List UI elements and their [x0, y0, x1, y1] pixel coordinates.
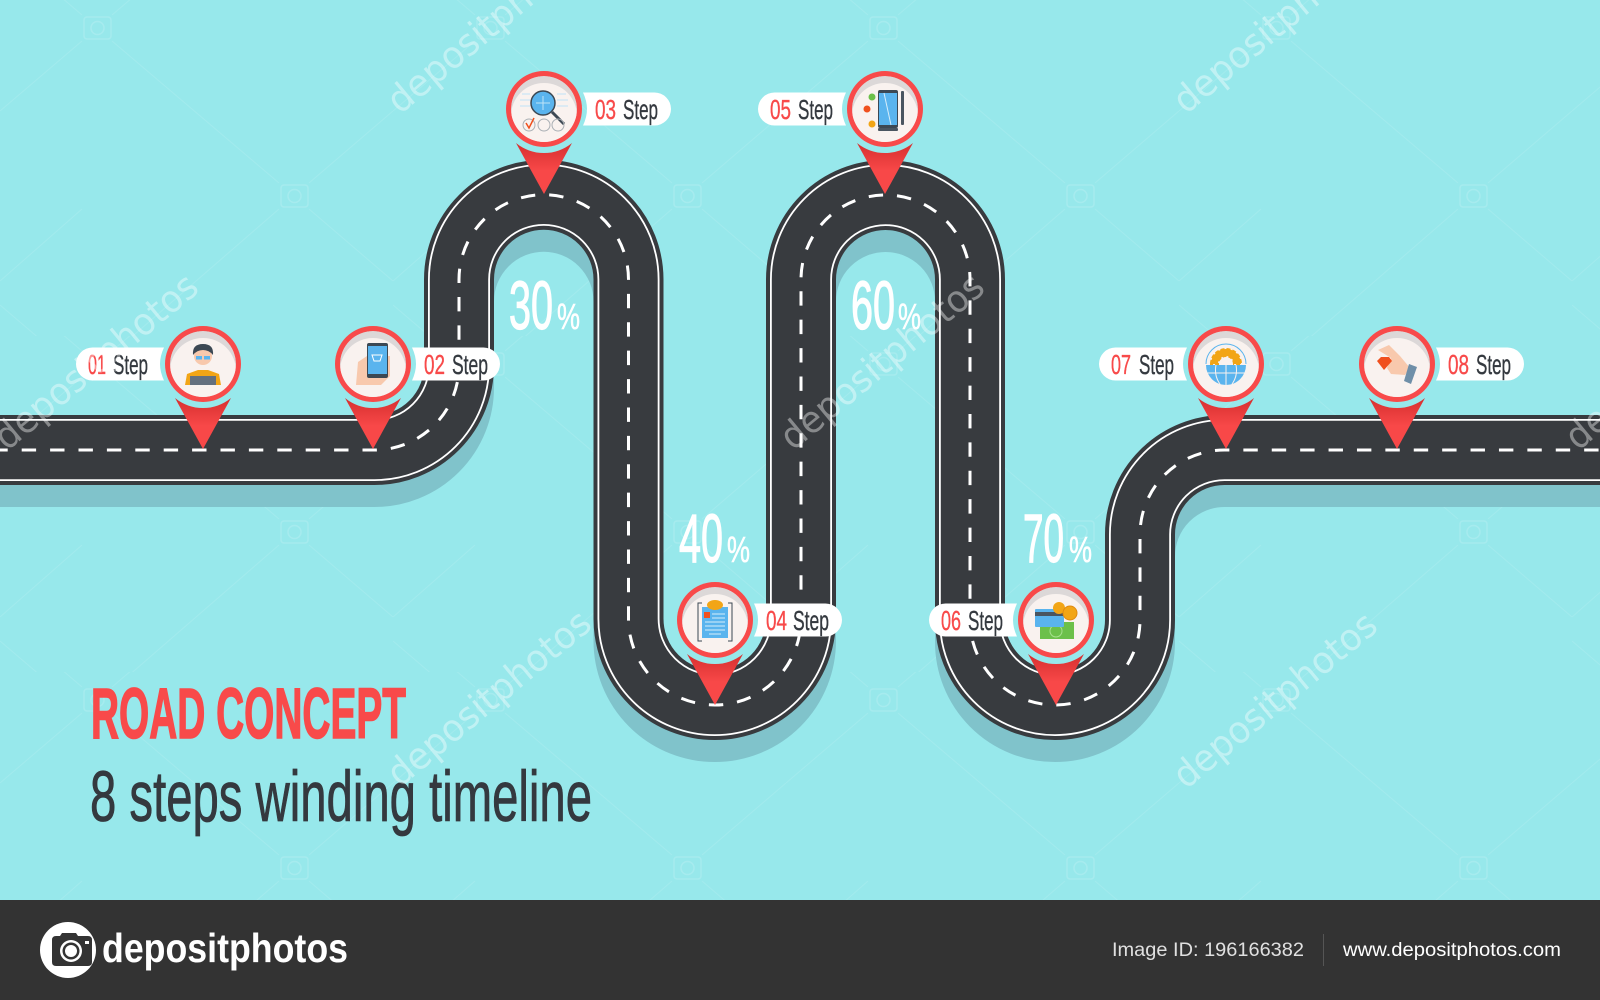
icon: hand with gem [1377, 345, 1417, 384]
pin: step 04: Step [793, 605, 829, 636]
icon: phone parts [864, 90, 904, 131]
percent: 70%: % [1069, 529, 1092, 570]
pin: step 06: 06 [941, 605, 961, 636]
pin: step 02 [335, 326, 500, 449]
pin: step 01: Step [113, 349, 148, 380]
percent: 30%: % [557, 296, 580, 337]
pin: step 05: 05 [770, 94, 791, 125]
icon: magnifier with checks [520, 91, 568, 131]
percent: 30%: 30 [509, 267, 553, 344]
pin: step 07 [1099, 326, 1264, 449]
pin: step 01: 01 [88, 349, 106, 380]
watermarks [0, 0, 1600, 797]
pin: step 08: 08 [1448, 349, 1469, 380]
pin: step 03 [506, 71, 671, 194]
watermarks: depositphotos [771, 264, 993, 458]
percent: 60%: % [898, 296, 921, 337]
pin: step 06: Step [968, 605, 1003, 636]
percent: 70%: 70 [1023, 500, 1064, 577]
pin: step 01 [76, 326, 241, 449]
percent: 40%: 40 [679, 500, 723, 577]
road shadow [0, 217, 1600, 727]
pin: step 03: 03 [595, 94, 616, 125]
icon: clipboard [698, 600, 732, 641]
pin: step 07: Step [1139, 349, 1174, 380]
footer logo text: depositphotos [102, 925, 348, 971]
pin: step 03: Step [623, 94, 658, 125]
icon: globe and gear [1206, 344, 1246, 385]
percent: 40%: % [727, 529, 750, 570]
pin: step 04: 04 [766, 605, 787, 636]
pin: step 08 [1359, 326, 1524, 449]
pin: step 08: Step [1476, 349, 1511, 380]
footer bar [0, 900, 1600, 1000]
footer url: www.depositphotos.com [1342, 939, 1561, 961]
watermarks: depositphotos [1164, 603, 1386, 797]
pin: step 07: 07 [1111, 349, 1131, 380]
icon: card and cash [1035, 602, 1077, 639]
title: ROAD CONCEPT [91, 675, 406, 754]
pin: step 05 [758, 71, 923, 194]
footer logo icon [40, 922, 96, 978]
pin: step 04 [677, 582, 842, 705]
percent: 60%: 60 [851, 267, 895, 344]
watermarks: depositphotos [378, 601, 600, 795]
pin: step 02: Step [452, 349, 488, 380]
icon: man with laptop [185, 344, 221, 385]
subtitle: 8 steps winding timeline [90, 758, 592, 837]
winding road [0, 195, 1600, 705]
icon: hand holding phone [356, 343, 390, 385]
pin: step 06 [929, 582, 1094, 705]
pin: step 02: 02 [424, 349, 445, 380]
pin: step 05: Step [798, 94, 833, 125]
footer image id: Image ID: 196166382 [1112, 939, 1304, 961]
